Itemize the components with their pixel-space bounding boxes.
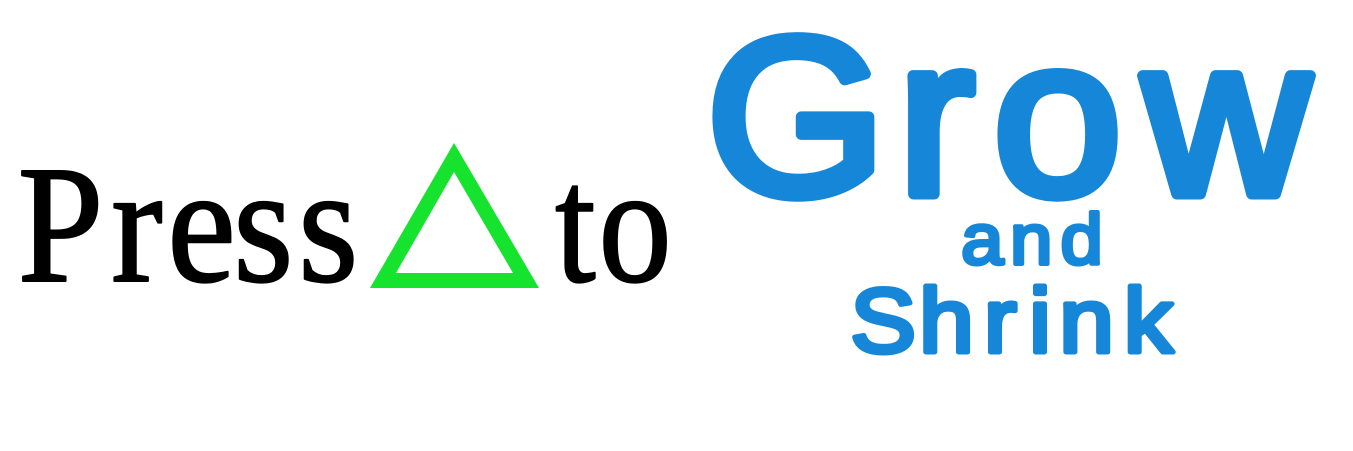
text: Shrink: Shrink — [850, 270, 1174, 372]
icon: green triangle — [370, 143, 539, 288]
text: Press: Press — [18, 131, 358, 317]
text: to: to — [555, 133, 672, 318]
text: and: and — [961, 199, 1103, 279]
